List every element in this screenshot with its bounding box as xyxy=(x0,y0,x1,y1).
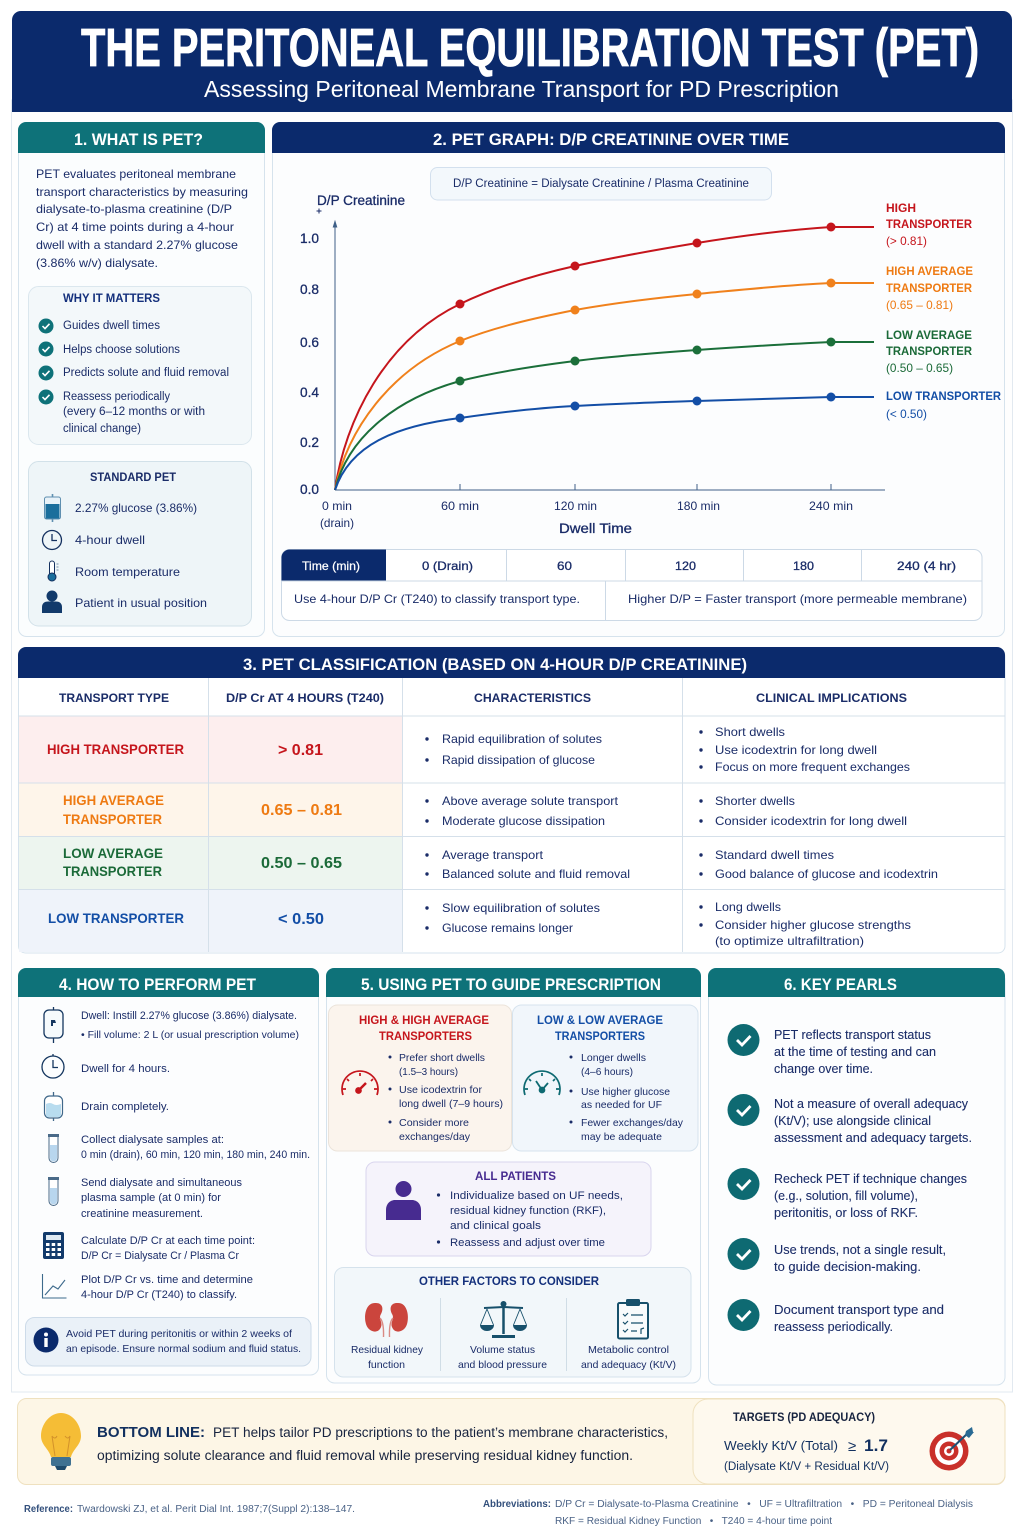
legend: high: HIGH xyxy=(886,201,916,215)
text block: definition: (3.86% w/v) dialysate. xyxy=(36,256,158,270)
pearl 4: to guide decision-making. xyxy=(774,1260,921,1274)
text block: definition: Cr) at 4 time points during a 4-hour xyxy=(36,220,234,234)
box: all patients: Individualize based on UF needs, xyxy=(450,1190,623,1202)
step: dwell xyxy=(44,1007,299,1043)
box: low and low average: Longer dwells xyxy=(581,1052,646,1064)
abbreviations: D/P Cr = Dialysate-to-Plasma Creatinine • UF = Ultrafiltration • PD = Peritoneal Dialysis xyxy=(555,1499,973,1510)
standard PET box: 4-hour dwell xyxy=(75,533,145,547)
icon: slow gauge xyxy=(524,1071,560,1095)
icon: test tube xyxy=(48,1134,59,1162)
sampling time table: 180 xyxy=(793,559,814,573)
box: all patients: and clinical goals xyxy=(450,1220,542,1232)
icon: clipboard xyxy=(618,1299,648,1338)
row: low transporter xyxy=(48,900,911,948)
row: high average transporter: HIGH AVERAGE xyxy=(63,792,164,808)
legend: low xyxy=(886,389,1001,421)
legend: high average: (0.65 – 0.81) xyxy=(886,298,953,312)
heading: 2. PET GRAPH: D/P CREATININE OVER TIME xyxy=(433,130,789,149)
icon: thermometer xyxy=(48,561,58,581)
curve: high average transporter xyxy=(335,278,874,490)
step: calculate xyxy=(43,1232,255,1262)
panel: using PET to guide prescription xyxy=(326,968,701,1383)
pearl 3: Recheck PET if technique changes xyxy=(774,1172,967,1186)
box: high and high average: long dwell (7–9 hours) xyxy=(399,1098,503,1110)
row: high average transporter: Consider icodextrin for long dwell xyxy=(715,814,907,828)
reference: Reference: xyxy=(24,1504,73,1515)
x axis ticks xyxy=(320,499,853,530)
why it matters box: clinical change) xyxy=(63,423,141,435)
text block: bottom line: optimizing solute clearance and fluid removal while preserving residual kidney function. xyxy=(97,1448,633,1463)
why it matters box: (every 6–12 months or with xyxy=(63,406,205,418)
row: high average transporter: Moderate glucose dissipation xyxy=(442,814,605,828)
box: all patients: residual kidney function (RKF), xyxy=(450,1205,606,1217)
curve: high transporter xyxy=(335,222,874,490)
callout: when to avoid: an episode. Ensure normal sodium and fluid status. xyxy=(66,1343,301,1355)
y axis ticks: 0.6 xyxy=(300,335,319,350)
why it matters box: Guides dwell times xyxy=(63,320,160,332)
row: high average transporter: 0.65 – 0.81 xyxy=(261,802,342,819)
step: calculate: D/P Cr = Dialysate Cr / Plasma Cr xyxy=(81,1250,239,1262)
row: high transporter: Rapid dissipation of glucose xyxy=(442,753,595,767)
row fills xyxy=(19,716,402,952)
text block: definition: PET evaluates peritoneal membrane xyxy=(36,167,236,181)
icon: calculator xyxy=(43,1232,64,1259)
icon: dialysate bag xyxy=(44,1007,63,1043)
standard PET box xyxy=(28,462,252,626)
targets box: TARGETS (PD ADEQUACY) xyxy=(733,1412,875,1424)
icon: balance scale xyxy=(480,1302,527,1338)
step: dwell: Dwell: Instill 2.27% glucose (3.86%) dialysate. xyxy=(81,1010,297,1022)
legend: low average xyxy=(886,328,972,375)
box: other factors: OTHER FACTORS TO CONSIDER xyxy=(419,1274,599,1288)
text block: definition: dialysate-to-plasma creatinine (D/P xyxy=(36,202,232,216)
icon: person xyxy=(386,1181,421,1220)
box: other factors: and blood pressure xyxy=(458,1359,547,1371)
row: low transporter: < 0.50 xyxy=(278,911,324,928)
icon: dialysate bag xyxy=(44,494,60,522)
step: drain: Drain completely. xyxy=(81,1101,169,1113)
legend: high average xyxy=(886,264,973,312)
pearl 3 xyxy=(728,1168,967,1220)
box: other factors: Metabolic control xyxy=(588,1344,669,1356)
box: high and high average: Prefer short dwells xyxy=(399,1052,485,1064)
row: low average transporter: Balanced solute and fluid removal xyxy=(442,867,630,881)
step: drain xyxy=(44,1092,169,1121)
text block: bottom line: BOTTOM LINE: xyxy=(97,1425,205,1441)
step: send: plasma sample (at 0 min) for xyxy=(81,1192,221,1204)
pearl 2: (Kt/V); use alongside clinical xyxy=(774,1114,931,1128)
row: low transporter: (to optimize ultrafiltration) xyxy=(715,934,864,948)
standard PET box: 2.27% glucose (3.86%) xyxy=(75,501,197,515)
pearl 1: PET reflects transport status xyxy=(774,1028,931,1042)
icon: info xyxy=(34,1328,58,1352)
x axis ticks: (drain) xyxy=(320,516,354,530)
icon: light bulb xyxy=(41,1413,81,1470)
curve: low transporter xyxy=(335,392,874,490)
x axis ticks: 0 min xyxy=(322,499,352,513)
icon: checks xyxy=(38,318,54,404)
column headers xyxy=(59,691,907,705)
y axis ticks: 0.4 xyxy=(300,385,319,400)
row: low transporter: Consider higher glucose strengths xyxy=(715,918,911,932)
panel: how to perform PET xyxy=(18,968,319,1375)
row: low average transporter: 0.50 – 0.65 xyxy=(261,855,342,872)
icon: patient xyxy=(42,590,62,613)
row: low transporter: LOW TRANSPORTER xyxy=(48,910,184,926)
heading: 3. PET CLASSIFICATION (BASED ON 4-HOUR D/P CREATININE) xyxy=(243,655,747,674)
y axis ticks: 1.0 xyxy=(300,231,319,246)
legend: high: TRANSPORTER xyxy=(886,217,972,231)
step: collect: Collect dialysate samples at: xyxy=(81,1134,224,1146)
row: high transporter: Use icodextrin for long dwell xyxy=(715,743,877,757)
box: high and high average: Consider more xyxy=(399,1117,469,1129)
pearl 3: peritonitis, or loss of RKF. xyxy=(774,1206,918,1220)
row: high transporter: Focus on more frequent exchanges xyxy=(715,760,910,774)
sampling time table: Time (min) xyxy=(302,559,360,573)
row: low average transporter xyxy=(63,845,938,881)
pearl 2: assessment and adequacy targets. xyxy=(774,1131,972,1145)
box: other factors: function xyxy=(368,1359,405,1371)
box: high and high average: TRANSPORTERS xyxy=(379,1029,472,1043)
legend: low: (< 0.50) xyxy=(886,407,927,421)
box: other factors: Residual kidney xyxy=(351,1344,424,1356)
row: high transporter: > 0.81 xyxy=(278,742,323,759)
row: low average transporter: Standard dwell times xyxy=(715,848,834,862)
pearl 5: Document transport type and xyxy=(774,1303,944,1317)
pearl 1 xyxy=(728,1024,936,1076)
step: collect: 0 min (drain), 60 min, 120 min, 180 min, 240 min. xyxy=(81,1149,310,1161)
x axis ticks: 120 min xyxy=(554,499,597,513)
y axis ticks: 0.0 xyxy=(300,482,319,497)
icon: graph xyxy=(42,1274,66,1298)
panel: what is PET xyxy=(18,122,265,636)
heading: 5. USING PET TO GUIDE PRESCRIPTION xyxy=(361,975,661,994)
icon: clock xyxy=(42,1054,64,1078)
text block: bottom line xyxy=(97,1425,668,1463)
callout: when to avoid xyxy=(26,1318,311,1366)
box: high and high average: exchanges/day xyxy=(399,1131,471,1143)
title banner xyxy=(12,11,1012,112)
pearl 2: Not a measure of overall adequacy xyxy=(774,1097,969,1111)
formula box: D/P Creatinine = Dialysate Creatinine / Plasma Creatinine xyxy=(453,178,749,190)
sampling time table: 60 xyxy=(557,559,572,573)
why it matters box: Reassess periodically xyxy=(63,391,170,403)
legend: low: LOW TRANSPORTER xyxy=(886,389,1001,403)
reference: Twardowski ZJ, et al. Perit Dial Int. 1987;7(Suppl 2):138–147. xyxy=(77,1504,355,1515)
sampling time table: 0 (Drain) xyxy=(422,559,473,573)
column headers: D/P Cr AT 4 HOURS (T240) xyxy=(226,691,384,705)
icon: kidneys xyxy=(365,1303,408,1337)
targets box: (Dialysate Kt/V + Residual Kt/V) xyxy=(724,1461,889,1473)
panel: key pearls xyxy=(708,968,1005,1385)
pearl 3: (e.g., solution, fill volume), xyxy=(774,1189,918,1203)
x axis ticks: 60 min xyxy=(441,499,479,513)
standard PET box: Room temperature xyxy=(75,565,180,579)
row: low average transporter: Average transport xyxy=(442,848,544,862)
sampling time table: Use 4-hour D/P Cr (T240) to classify transport type. xyxy=(294,592,580,606)
pearl 2 xyxy=(728,1094,972,1145)
box: all patients: ALL PATIENTS xyxy=(475,1169,556,1183)
column headers: TRANSPORT TYPE xyxy=(59,691,169,705)
legend: high xyxy=(886,201,972,248)
pearl 4: Use trends, not a single result, xyxy=(774,1243,946,1257)
targets box: ≥ xyxy=(848,1438,856,1455)
row: high transporter: HIGH TRANSPORTER xyxy=(47,741,184,757)
step: collect xyxy=(48,1134,310,1162)
row: high average transporter: Shorter dwells xyxy=(715,794,795,808)
pearl 5 xyxy=(728,1299,944,1334)
callout: when to avoid: Avoid PET during peritonitis or within 2 weeks of xyxy=(66,1328,292,1340)
step: plot: 4-hour D/P Cr (T240) to classify. xyxy=(81,1289,237,1301)
sampling time table: 120 xyxy=(675,559,696,573)
row: low transporter: Long dwells xyxy=(715,900,781,914)
box: low and low average: LOW & LOW AVERAGE xyxy=(537,1013,663,1027)
why it matters box: Predicts solute and fluid removal xyxy=(63,367,229,379)
legend: high average: HIGH AVERAGE xyxy=(886,264,973,278)
text block: definition xyxy=(36,167,248,270)
row: low transporter: Slow equilibration of solutes xyxy=(442,901,600,915)
abbreviations xyxy=(483,1499,973,1527)
why it matters box: WHY IT MATTERS xyxy=(63,291,160,305)
step: wait: Dwell for 4 hours. xyxy=(81,1063,170,1075)
step: send: Send dialysate and simultaneous xyxy=(81,1177,242,1189)
x axis label: Dwell Time xyxy=(559,520,632,536)
legend: high average: TRANSPORTER xyxy=(886,281,972,295)
abbreviations: Abbreviations: xyxy=(483,1499,551,1510)
row: high transporter xyxy=(47,725,910,774)
pearl 1: at the time of testing and can xyxy=(774,1045,936,1059)
column headers: CHARACTERISTICS xyxy=(474,691,591,705)
row: low average transporter: LOW AVERAGE xyxy=(63,845,163,861)
icon: drain bag xyxy=(44,1092,62,1121)
sampling time table: 240 (4 hr) xyxy=(897,559,956,573)
row: high average transporter: TRANSPORTER xyxy=(63,811,162,827)
y axis ticks: 0.2 xyxy=(300,435,319,450)
curve: low average transporter xyxy=(335,338,874,490)
icon: fast gauge xyxy=(342,1071,378,1095)
line chart xyxy=(300,193,1001,536)
standard PET box: STANDARD PET xyxy=(90,470,177,484)
abbreviations: RKF = Residual Kidney Function • T240 = 4-hour time point xyxy=(555,1516,832,1527)
pearl 5: reassess periodically. xyxy=(774,1320,893,1334)
row: high average transporter: Above average solute transport xyxy=(442,794,619,808)
step: send: creatinine measurement. xyxy=(81,1208,203,1220)
step: calculate: Calculate D/P Cr at each time point: xyxy=(81,1235,255,1247)
subtitle: Assessing Peritoneal Membrane Transport for PD Prescription xyxy=(204,76,839,102)
why it matters box: Helps choose solutions xyxy=(63,344,180,356)
box: other factors: and adequacy (Kt/V) xyxy=(581,1359,676,1371)
step: send xyxy=(48,1177,242,1220)
panel: PET classification table xyxy=(18,647,1005,953)
step: plot xyxy=(42,1274,253,1301)
text block: bottom line: PET helps tailor PD prescriptions to the patient’s membrane characteristics, xyxy=(213,1425,668,1440)
text block: definition: dwell with a standard 2.27% glucose xyxy=(36,238,238,252)
column headers: CLINICAL IMPLICATIONS xyxy=(756,691,907,705)
row: high transporter: Rapid equilibration of solutes xyxy=(442,732,602,746)
sampling time table: Higher D/P = Faster transport (more permeable membrane) xyxy=(628,592,967,606)
heading: 1. WHAT IS PET? xyxy=(74,130,203,149)
panel: PET graph xyxy=(272,122,1005,636)
icon: clock xyxy=(42,530,62,550)
box: other factors: Volume status xyxy=(470,1344,535,1356)
targets box: 1.7 xyxy=(864,1436,888,1455)
box: low and low average: may be adequate xyxy=(581,1131,662,1143)
x axis ticks: 180 min xyxy=(677,499,720,513)
box: high and high average: HIGH & HIGH AVERAGE xyxy=(359,1013,489,1027)
step: dwell: • Fill volume: 2 L (or usual prescription volume) xyxy=(81,1029,299,1041)
row: high transporter: Short dwells xyxy=(715,725,785,739)
text block: definition: transport characteristics by measuring xyxy=(36,185,248,199)
why it matters box xyxy=(28,286,252,444)
panel: bottom line xyxy=(18,1398,1005,1484)
targets box xyxy=(693,1399,1005,1484)
heading: 6. KEY PEARLS xyxy=(784,975,897,994)
box: low and low average: TRANSPORTERS xyxy=(555,1029,645,1043)
step: plot: Plot D/P Cr vs. time and determine xyxy=(81,1274,253,1286)
box: high and high average xyxy=(328,1005,512,1151)
icon: target xyxy=(930,1427,974,1470)
targets box: Weekly Kt/V (Total) xyxy=(724,1438,838,1453)
box: other factors xyxy=(334,1268,691,1377)
standard PET box: Patient in usual position xyxy=(75,596,207,610)
box: low and low average: as needed for UF xyxy=(581,1099,662,1111)
row: high average transporter xyxy=(63,792,907,828)
box: all patients xyxy=(366,1162,651,1256)
box: low and low average: Fewer exchanges/day xyxy=(581,1117,684,1129)
x axis ticks: 240 min xyxy=(809,499,853,513)
legend: low average: LOW AVERAGE xyxy=(886,328,972,342)
box: high and high average: (1.5–3 hours) xyxy=(399,1066,458,1078)
step: wait xyxy=(42,1054,170,1078)
row: low average transporter: Good balance of glucose and icodextrin xyxy=(715,867,938,881)
y axis ticks xyxy=(300,231,319,497)
heading: 4. HOW TO PERFORM PET xyxy=(59,975,257,994)
sampling time table xyxy=(282,550,982,620)
box: low and low average: Use higher glucose xyxy=(581,1086,670,1098)
box: high and high average: Use icodextrin for xyxy=(399,1084,483,1096)
legend: low average: TRANSPORTER xyxy=(886,344,972,358)
row: low average transporter: TRANSPORTER xyxy=(63,863,162,879)
box: low and low average xyxy=(512,1005,698,1151)
formula box xyxy=(430,168,772,200)
box: all patients: Reassess and adjust over time xyxy=(450,1237,605,1249)
y axis label: D/P Creatinine xyxy=(317,193,405,208)
legend: high: (> 0.81) xyxy=(886,234,927,248)
row: low transporter: Glucose remains longer xyxy=(442,921,573,935)
pearl 1: change over time. xyxy=(774,1062,873,1076)
icon: test tube xyxy=(48,1177,59,1206)
pearl 4 xyxy=(728,1238,946,1274)
box: low and low average: (4–6 hours) xyxy=(581,1066,633,1078)
y axis ticks: 0.8 xyxy=(300,282,319,297)
legend: low average: (0.50 – 0.65) xyxy=(886,361,953,375)
